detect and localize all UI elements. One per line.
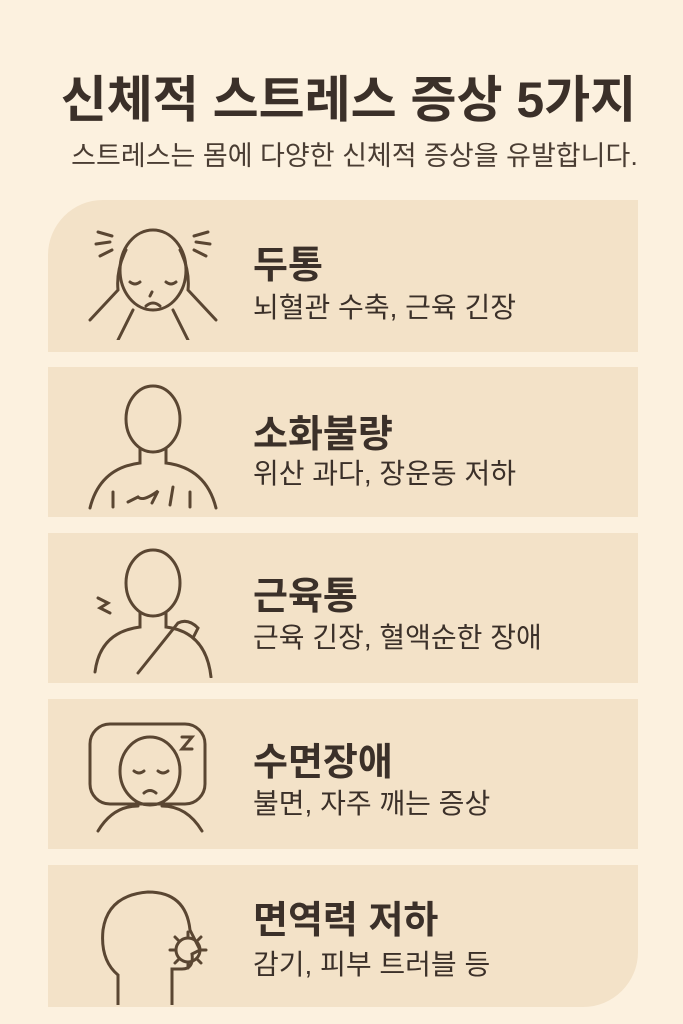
panel: sleep disorder <box>48 699 638 849</box>
subtitle: 스트레스는 몸에 다양한 신체적 증상을 유발합니다. <box>71 141 638 171</box>
heading: 근육통 <box>253 576 358 618</box>
heading: 수면장애 <box>253 742 393 784</box>
description: 뇌혈관 수축, 근육 긴장 <box>253 292 516 323</box>
panel: indigestion <box>48 367 638 517</box>
icon: head with virus <box>101 890 208 1005</box>
description: 위산 과다, 장운동 저하 <box>253 458 516 489</box>
heading: 소화불량 <box>253 414 393 456</box>
icon: shoulder pain <box>94 548 212 678</box>
icon: sleeping <box>88 722 206 833</box>
description: 불면, 자주 깨는 증상 <box>253 788 490 819</box>
panel: muscle pain <box>48 533 638 683</box>
heading: 면역력 저하 <box>253 900 438 942</box>
icon: person stomach <box>88 384 218 510</box>
description: 감기, 피부 트러블 등 <box>253 949 490 980</box>
description: 근육 긴장, 혈액순한 장애 <box>253 622 542 653</box>
heading: 두통 <box>253 245 323 287</box>
title: 신체적 스트레스 증상 5가지 <box>61 72 636 128</box>
panel: immunity <box>48 865 638 1007</box>
icon: headache <box>88 228 218 340</box>
panel: headache <box>48 200 638 352</box>
